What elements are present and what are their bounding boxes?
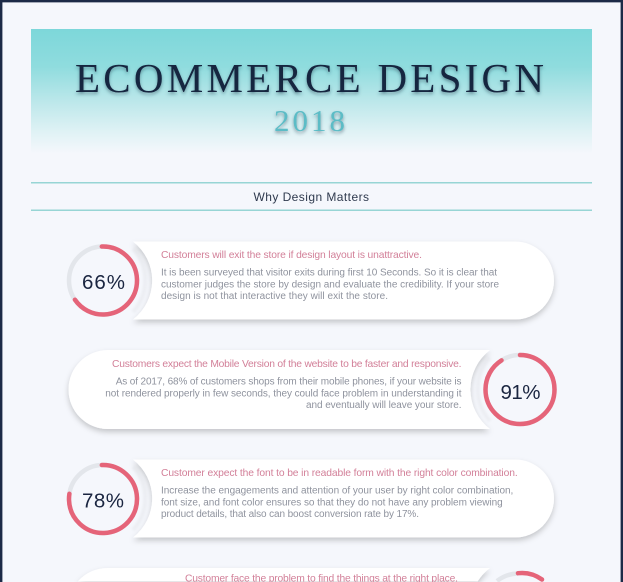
- body text: [161, 268, 499, 302]
- title: ECOMMERCE DESIGN: [75, 55, 544, 101]
- card: [133, 242, 554, 320]
- body text: It is been surveyed that visitor exits during first 10 Seconds. So it is clear that: [161, 268, 497, 278]
- heading: Customers will exit the store if design layout is unattractive.: [161, 250, 422, 261]
- card: [78, 568, 490, 582]
- body text: design is not that interactive they will exit the store.: [161, 291, 388, 302]
- body text: As of 2017, 68% of customers shops from their mobile phones, if your website is: [116, 376, 461, 388]
- percentage: 78%: [82, 490, 124, 512]
- header banner: [31, 29, 592, 154]
- heading: Customers expect the Mobile Version of the website to be faster and responsive.: [112, 359, 462, 370]
- ring chart: [68, 245, 138, 316]
- section heading: why design matters: Why Design Matters: [254, 190, 369, 204]
- percentage: 91%: [500, 381, 540, 404]
- body text: Increase the engagements and attention of your user by right color combination,: [161, 486, 513, 496]
- body text: and eventually will leave your store.: [306, 400, 462, 411]
- ring chart: [497, 573, 542, 581]
- body text: customer judges the store by design and evaluate the credibility. If your store: [161, 280, 499, 290]
- body text: [161, 486, 513, 520]
- body text: product details, that also can boost conversion rate by 17%.: [161, 509, 419, 520]
- card: [133, 460, 554, 538]
- heading: Customer expect the font to be in readable form with the right color combination.: [161, 468, 518, 479]
- percentage: 66%: [82, 271, 125, 294]
- card: [69, 350, 490, 429]
- body text: not rendered properly in few seconds, they could face problem in understanding it: [105, 388, 462, 400]
- body text: font size, and font color ensures so that they do not have any problem viewing: [161, 498, 503, 508]
- panel: 78 percent: [68, 460, 554, 538]
- panel: 66 percent: [68, 242, 554, 320]
- ring chart: [68, 464, 138, 534]
- panel: 91 percent: [69, 350, 555, 429]
- body text: [105, 376, 462, 411]
- panel: fourth card, cropped by page edge: [78, 568, 542, 582]
- ring chart: [486, 355, 554, 424]
- year: 2018: [274, 103, 345, 138]
